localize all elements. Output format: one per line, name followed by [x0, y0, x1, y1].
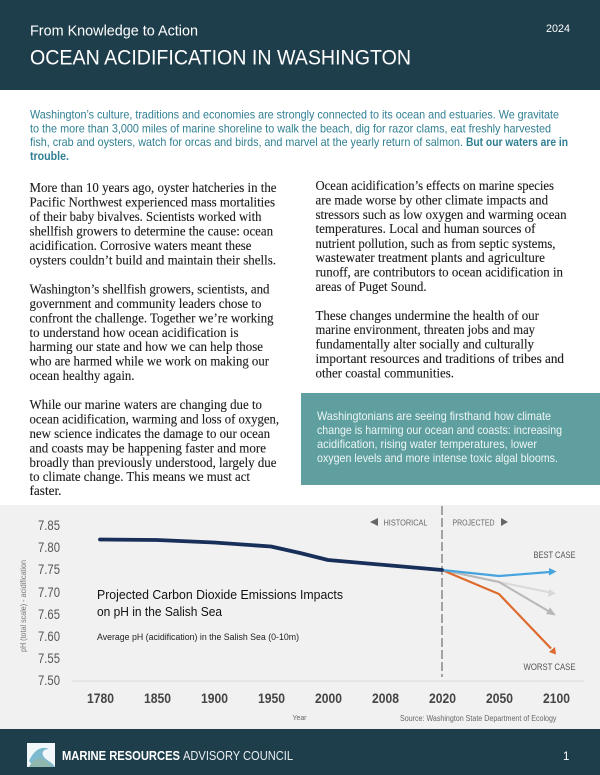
chart panel: projected pH — [0, 505, 600, 729]
source note: Source: Washington State Department of Ecology — [400, 714, 557, 723]
right column body text: nutrient pollution, such as from septic systems, — [316, 237, 556, 252]
left column body text: Washington’s shellfish growers, scientists, and — [30, 282, 270, 298]
x axis year labels: 1850 — [144, 691, 171, 706]
left column body text: ocean healthy again. — [30, 369, 134, 384]
intro text block: to the more than 3,000 miles of marine shoreline to walk the beach, dig for razor clams, eat freshly harvested — [30, 122, 551, 136]
council name: ADVISORY COUNCIL — [183, 748, 293, 763]
worst case line — [442, 570, 556, 654]
best case line — [442, 568, 556, 576]
right column body text: fundamentally alter socially and culturally — [316, 338, 534, 352]
y axis tick labels: 7.65 — [38, 607, 60, 622]
callout box: Washingtonians are seeing firsthand how climate — [317, 409, 551, 423]
chart title line two: on pH in the Salish Sea — [97, 604, 223, 619]
historical / projected divider — [441, 506, 443, 677]
title: OCEAN ACIDIFICATION IN WASHINGTON — [30, 46, 411, 70]
best case label: BEST CASE — [534, 550, 576, 560]
historical label with arrow — [370, 518, 428, 528]
callout box — [301, 393, 600, 485]
x axis year labels: 1900 — [201, 691, 228, 706]
right column body text: stressors such as low oxygen and warming ocean — [316, 208, 567, 223]
left column body text: of their baby bivalves. Scientists worked with — [30, 210, 262, 225]
intro text block: But our waters are in — [466, 135, 568, 149]
right column body text: These changes undermine the health of our — [316, 309, 539, 324]
right column body text: other coastal communities. — [316, 366, 454, 382]
y axis tick labels: 7.75 — [38, 562, 60, 577]
right column body text: temperatures. Local and human sources of — [316, 222, 536, 237]
y axis tick labels: 7.80 — [38, 540, 60, 555]
y axis title: pH (total scale) - acidification — [19, 560, 28, 652]
left column body text: Pacific Northwest experienced mass mortalities — [30, 196, 275, 210]
right column body text: runoff, are contributors to ocean acidification in — [316, 266, 563, 280]
left column body text — [30, 181, 279, 499]
left column body text: While our marine waters are changing due to — [30, 398, 262, 413]
right column body text: wastewater treatment plants and agriculture — [316, 251, 545, 266]
left column body text: to climate change. This means we must act — [30, 470, 250, 485]
left column body text: harming our state and how we can help those — [30, 340, 263, 355]
header banner — [0, 0, 600, 90]
historical line — [100, 540, 442, 570]
chart subtitle: Average pH (acidification) in the Salish Sea (0-10m) — [97, 632, 299, 642]
right column body text: Ocean acidification’s effects on marine species — [316, 179, 554, 194]
left column body text: new science indicates the damage to our ocean — [30, 427, 270, 442]
left column body text: ocean acidification, warming and loss of oxygen, — [30, 412, 279, 428]
right column body text: marine environment, threaten jobs and may — [316, 323, 535, 338]
intro text block: Washington’s culture, traditions and economies are strongly connected to its ocean and estuaries. We gravitate — [30, 108, 559, 122]
historical label with arrow: HISTORICAL — [384, 518, 428, 528]
y axis tick labels: 7.50 — [38, 673, 60, 688]
year: 2024 — [546, 23, 570, 35]
left column body text: acidification. Corrosive waters meant these — [30, 239, 252, 254]
right column body text: important resources and traditions of tribes and — [316, 352, 564, 367]
x axis year labels: 2000 — [315, 691, 342, 706]
x axis year labels: 2050 — [486, 691, 513, 706]
icon: wave logo — [27, 743, 55, 767]
left column body text: confront the challenge. Together we’re working — [30, 312, 274, 326]
left column body text: to understand how ocean acidification is — [30, 326, 238, 341]
council name: MARINE RESOURCES — [62, 748, 180, 763]
x axis year labels: 1950 — [258, 691, 285, 706]
callout box: change is harming our ocean and coasts: increasing — [317, 423, 562, 437]
right column body text: are made worse by other climate impacts and — [316, 194, 548, 208]
left column body text: broadly than previously understood, largely due — [30, 456, 276, 471]
left column body text: shellfish growers to determine the cause: ocean — [30, 224, 273, 240]
left column body text: oysters couldn’t build and maintain their shells. — [30, 254, 276, 268]
left column body text: faster. — [30, 484, 62, 499]
grey scenario line — [442, 570, 556, 616]
y axis tick labels: 7.70 — [38, 585, 60, 600]
footer banner — [0, 729, 600, 775]
left column body text: who are harmed while we work on making our — [30, 354, 269, 370]
light grey scenario line — [442, 570, 556, 597]
y axis tick labels — [38, 518, 60, 688]
kicker: From Knowledge to Action — [30, 24, 198, 40]
right column body text — [316, 179, 567, 382]
y axis tick labels: 7.55 — [38, 651, 60, 666]
worst case label: WORST CASE — [524, 662, 576, 672]
left column body text: government and community leaders chose to — [30, 297, 262, 312]
left column body text: and coasts may be happening faster and more — [30, 442, 266, 456]
right column body text: areas of Puget Sound. — [316, 280, 426, 295]
x axis year labels — [87, 691, 570, 706]
page number: 1 — [563, 751, 569, 763]
intro text block — [30, 108, 568, 163]
x axis year labels: 2008 — [372, 691, 399, 706]
x axis year labels: 1780 — [87, 691, 114, 706]
left column body text: More than 10 years ago, oyster hatcheries in the — [30, 181, 276, 196]
callout box: oxygen levels and more intense toxic algal blooms. — [317, 451, 558, 465]
intro text block: fish, crab and oysters, watch for orcas and birds, and marvel at the yearly return of salmon. — [30, 135, 463, 149]
projected label with arrow: PROJECTED — [452, 518, 494, 528]
y axis tick labels: 7.85 — [38, 518, 60, 533]
x axis title: Year — [292, 715, 307, 722]
x axis year labels: 2100 — [543, 691, 570, 706]
y axis tick labels: 7.60 — [38, 629, 60, 644]
intro text block: trouble. — [30, 149, 69, 163]
callout box: acidification, rising water temperatures, lower — [317, 437, 537, 451]
x axis year labels: 2020 — [429, 691, 456, 706]
chart title: Projected Carbon Dioxide Emissions Impacts — [97, 587, 343, 602]
